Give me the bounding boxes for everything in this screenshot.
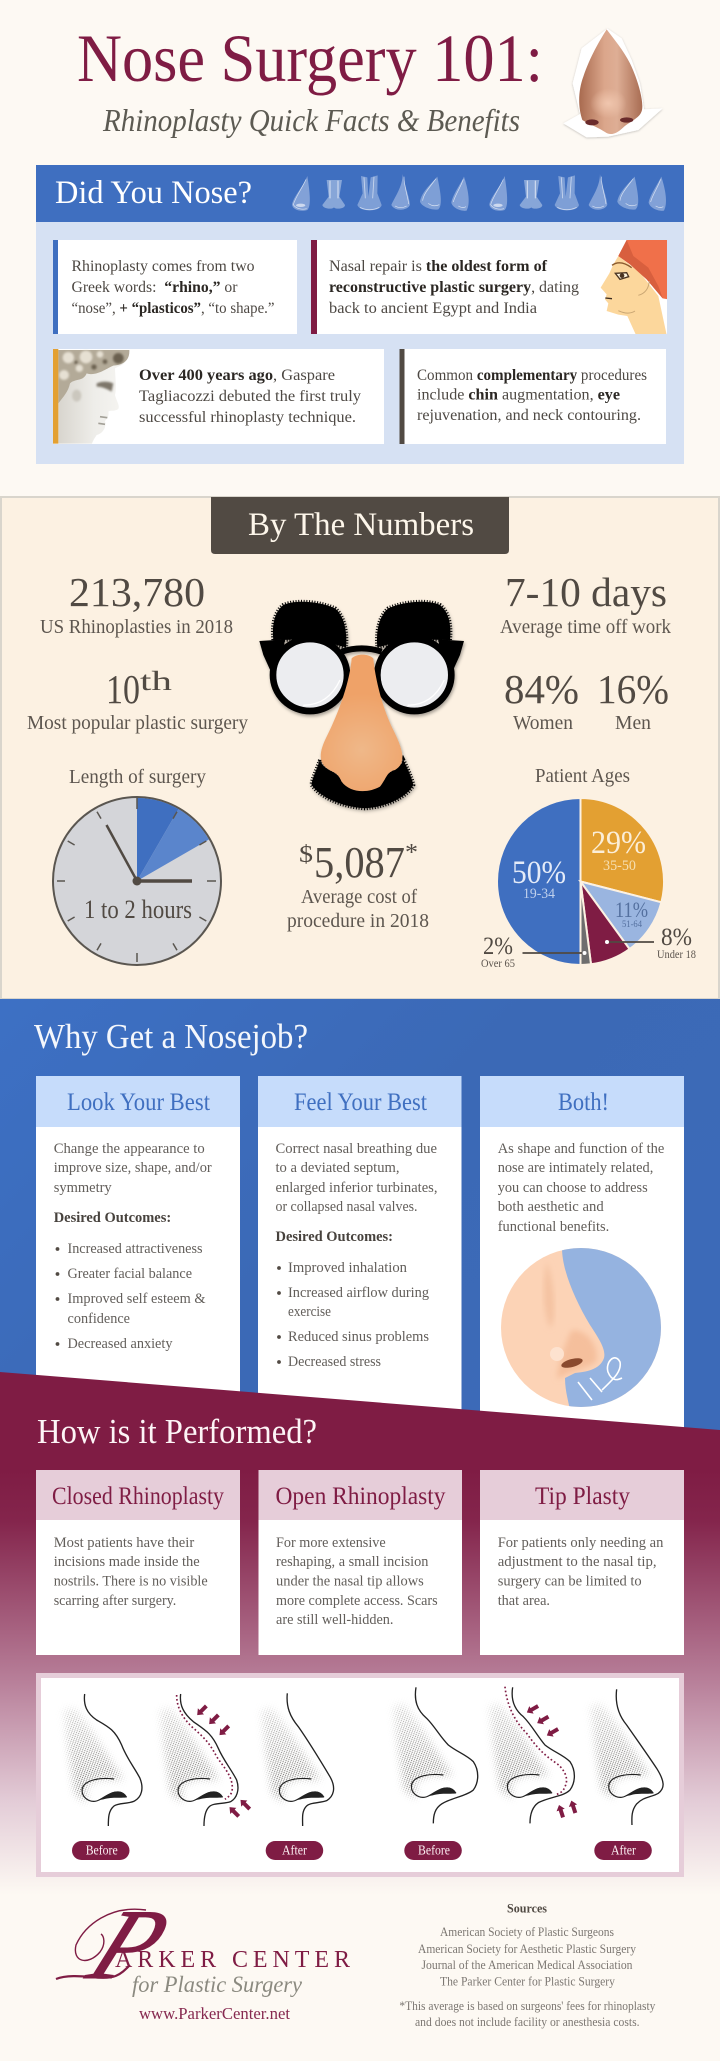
card: open rhinoplasty: For more extensive bbox=[276, 1535, 386, 1551]
pill: after: After bbox=[282, 1844, 307, 1859]
card: feel your best: Improved inhalation bbox=[288, 1260, 407, 1276]
chart: patient ages pie: 11% bbox=[615, 897, 648, 922]
card: look your best: Improved self esteem & bbox=[68, 1291, 206, 1307]
stat: average cost: * bbox=[405, 840, 418, 866]
logo: parker center bbox=[56, 1889, 350, 2023]
chart: patient ages pie: Over 65 bbox=[481, 956, 515, 970]
panel: how is it performed background bbox=[0, 1372, 720, 1895]
sources: American Society of Plastic Surgeons bbox=[440, 1924, 614, 1939]
stat: total rhinoplasties: US Rhinoplasties in 2018 bbox=[40, 616, 233, 638]
card: closed rhinoplasty: incisions made inside the bbox=[54, 1554, 200, 1570]
card: tip plasty bbox=[480, 1470, 684, 1655]
card: over 400 years: Over 400 years ago, Gaspare bbox=[139, 367, 335, 384]
chart: patient ages pie bbox=[481, 765, 696, 970]
stat: tenth most popular: th bbox=[140, 666, 173, 696]
stat: women and men: Men bbox=[615, 712, 651, 734]
diagram set: right noses bbox=[379, 1687, 670, 1825]
stat: time off work: Average time off work bbox=[500, 616, 671, 638]
pill: before bbox=[72, 1841, 130, 1860]
chart: patient ages pie: 19-34 bbox=[523, 886, 555, 902]
card: over 400 years: Tagliacozzi debuted the first truly bbox=[139, 388, 361, 405]
heading: Did You Nose? bbox=[55, 175, 252, 211]
card: both: nose are intimately related, bbox=[498, 1160, 653, 1176]
chart: patient ages pie: 51-64 bbox=[622, 919, 642, 929]
card: both: you can choose to address bbox=[498, 1180, 648, 1196]
card: feel your best: Correct nasal breathing due bbox=[276, 1141, 437, 1157]
card: feel your best: Decreased stress bbox=[288, 1354, 381, 1370]
icon: groucho glasses disguise bbox=[259, 602, 464, 808]
card: both: As shape and function of the bbox=[498, 1141, 665, 1157]
heading: Why Get a Nosejob? bbox=[34, 1017, 308, 1056]
sources bbox=[399, 1900, 656, 2029]
pill: after bbox=[266, 1841, 323, 1860]
card: over 400 years bbox=[53, 349, 384, 444]
card: closed rhinoplasty: nostrils. There is no visible bbox=[54, 1574, 208, 1590]
pill: after bbox=[594, 1841, 652, 1860]
stat: average cost: Average cost of bbox=[301, 886, 417, 908]
card: feel your best bbox=[258, 1076, 462, 1416]
chart: patient ages pie: 35-50 bbox=[603, 858, 636, 874]
card: tip plasty: For patients only needing an bbox=[498, 1535, 664, 1551]
card: greek words: “nose”, + “plasticos”, “to shape.” bbox=[72, 300, 274, 317]
stat: average cost bbox=[287, 838, 429, 932]
card: closed rhinoplasty bbox=[36, 1470, 240, 1655]
card: look your best: Greater facial balance bbox=[68, 1266, 192, 1282]
logo: parker center: P bbox=[73, 1889, 185, 2000]
card: both bbox=[480, 1076, 684, 1434]
card: over 400 years: successful rhinoplasty technique. bbox=[139, 409, 356, 426]
logo: parker center: www.ParkerCenter.net bbox=[139, 2004, 290, 2023]
stat: total rhinoplasties bbox=[40, 569, 233, 638]
card: open rhinoplasty: are still well-hidden. bbox=[276, 1612, 394, 1628]
card: look your best: symmetry bbox=[54, 1180, 112, 1196]
panel header bbox=[36, 165, 684, 222]
icon: egyptian profile bbox=[601, 240, 668, 338]
card: feel your best: exercise bbox=[288, 1304, 331, 1320]
title: Nose Surgery 101: bbox=[77, 20, 543, 96]
sources: Sources bbox=[507, 1900, 547, 1916]
icon: marble statue head bbox=[53, 349, 129, 444]
pill: before: Before bbox=[86, 1844, 118, 1859]
section tab heading: By The Numbers bbox=[248, 507, 474, 543]
card: feel your best: or collapsed nasal valves. bbox=[276, 1199, 418, 1215]
card: oldest form bbox=[311, 240, 668, 338]
card: feel your best: Reduced sinus problems bbox=[288, 1329, 429, 1345]
stat: time off work: 7-10 days bbox=[505, 569, 667, 615]
card: oldest form: Nasal repair is the oldest form of bbox=[329, 258, 548, 275]
card: both: Both! bbox=[558, 1089, 609, 1116]
card: feel your best: Increased airflow during bbox=[288, 1285, 429, 1301]
stat: average cost: procedure in 2018 bbox=[287, 910, 429, 932]
card: feel your best: to a deviated septum, bbox=[276, 1160, 400, 1176]
chart: length of surgery clock: Length of surgery bbox=[69, 766, 206, 788]
card: closed rhinoplasty: Most patients have their bbox=[54, 1535, 194, 1551]
card: open rhinoplasty bbox=[258, 1470, 462, 1655]
pill: before: Before bbox=[418, 1844, 450, 1859]
chart: patient ages pie: Under 18 bbox=[657, 947, 696, 961]
stat: women and men: 16% bbox=[597, 666, 669, 712]
card: look your best: Look Your Best bbox=[67, 1089, 210, 1116]
card: closed rhinoplasty: scarring after surgery. bbox=[54, 1593, 176, 1609]
sources: Journal of the American Medical Association bbox=[422, 1957, 633, 1972]
card: feel your best: Desired Outcomes: bbox=[276, 1229, 393, 1245]
card: feel your best: enlarged inferior turbinates, bbox=[276, 1180, 438, 1196]
stat: women and men bbox=[504, 666, 669, 734]
card: tip plasty: adjustment to the nasal tip, bbox=[498, 1554, 657, 1570]
chart: length of surgery clock bbox=[53, 766, 221, 965]
card: open rhinoplasty: more complete access. Scars bbox=[276, 1593, 438, 1609]
card: greek words: Greek words: “rhino,” or bbox=[72, 279, 238, 296]
card: open rhinoplasty: under the nasal tip allows bbox=[276, 1574, 424, 1590]
stat: tenth most popular bbox=[27, 666, 248, 734]
stat: tenth most popular: Most popular plastic surgery bbox=[27, 712, 248, 734]
heading: how is it performed: How is it Performed? bbox=[37, 1412, 317, 1451]
card: both: functional benefits. bbox=[498, 1219, 609, 1235]
card: look your best: Decreased anxiety bbox=[68, 1336, 173, 1352]
stat: total rhinoplasties: 213,780 bbox=[69, 569, 205, 615]
sources: and does not include facility or anesthesia costs. bbox=[415, 2014, 640, 2029]
icon: nose breathing airflow bbox=[501, 1248, 661, 1407]
card: closed rhinoplasty: Closed Rhinoplasty bbox=[52, 1483, 224, 1510]
stat: average cost: 5,087 bbox=[314, 838, 405, 887]
section tab heading bbox=[211, 497, 509, 554]
panel: by the numbers bbox=[1, 497, 719, 999]
stat: women and men: 84% bbox=[504, 666, 579, 712]
card: open rhinoplasty: reshaping, a small incision bbox=[276, 1554, 429, 1570]
card: look your best: Change the appearance to bbox=[54, 1141, 205, 1157]
chart: patient ages pie: Patient Ages bbox=[535, 765, 630, 787]
chart: patient ages pie: 50% bbox=[512, 855, 566, 891]
card: tip plasty: Tip Plasty bbox=[535, 1483, 630, 1510]
sources: *This average is based on surgeons' fees for rhinoplasty bbox=[399, 1998, 656, 2013]
card: greek words: Rhinoplasty comes from two bbox=[72, 258, 254, 275]
card: tip plasty: surgery can be limited to bbox=[498, 1574, 642, 1590]
chart: patient ages pie: 8% bbox=[661, 924, 692, 951]
icon: nose bursting through paper bbox=[563, 29, 663, 137]
stat: time off work bbox=[500, 569, 671, 638]
panel: why get a nosejob bbox=[0, 999, 720, 1439]
card: open rhinoplasty: Open Rhinoplasty bbox=[276, 1483, 446, 1510]
chart: patient ages pie: 29% bbox=[591, 825, 646, 861]
card: complementary procedures: Common complementary procedures bbox=[417, 367, 647, 384]
panel: did you nose bbox=[36, 165, 684, 464]
card: feel your best: Feel Your Best bbox=[294, 1089, 427, 1116]
card: look your best: Increased attractiveness bbox=[68, 1241, 203, 1257]
card: look your best: improve size, shape, and/or bbox=[54, 1160, 212, 1176]
card: complementary procedures: include chin augmentation, eye bbox=[417, 386, 620, 404]
subtitle: Rhinoplasty Quick Facts & Benefits bbox=[102, 102, 520, 138]
diagram set: left noses bbox=[50, 1693, 341, 1826]
card: both: both aesthetic and bbox=[498, 1199, 604, 1215]
card: complementary procedures bbox=[400, 349, 666, 444]
card: oldest form: reconstructive plastic surgery, dating bbox=[329, 279, 579, 296]
logo: parker center: ARKER CENTER bbox=[115, 1947, 350, 1973]
stat: average cost: $ bbox=[299, 842, 313, 868]
panel: before and after diagrams bbox=[38, 1676, 682, 1874]
card: greek words bbox=[53, 240, 297, 334]
icon row: nose sketches bbox=[292, 174, 666, 211]
logo: parker center: for Plastic Surgery bbox=[132, 1972, 303, 1997]
pill: before bbox=[404, 1841, 462, 1860]
chart: patient ages pie: 2% bbox=[483, 933, 513, 960]
stat: tenth most popular: 10 bbox=[106, 666, 140, 712]
chart: length of surgery clock: 1 to 2 hours bbox=[84, 895, 192, 924]
card: complementary procedures: rejuvenation, and neck contouring. bbox=[417, 407, 641, 424]
pill: after: After bbox=[611, 1844, 636, 1859]
card: look your best: Desired Outcomes: bbox=[54, 1210, 171, 1226]
card: look your best bbox=[36, 1076, 240, 1406]
stat: women and men: Women bbox=[513, 712, 573, 734]
sources: American Society for Aesthetic Plastic Surgery bbox=[418, 1941, 636, 1956]
card: oldest form: back to ancient Egypt and India bbox=[329, 300, 537, 317]
card: look your best: confidence bbox=[68, 1311, 130, 1327]
card: tip plasty: that area. bbox=[498, 1593, 550, 1609]
sources: The Parker Center for Plastic Surgery bbox=[440, 1974, 615, 1989]
